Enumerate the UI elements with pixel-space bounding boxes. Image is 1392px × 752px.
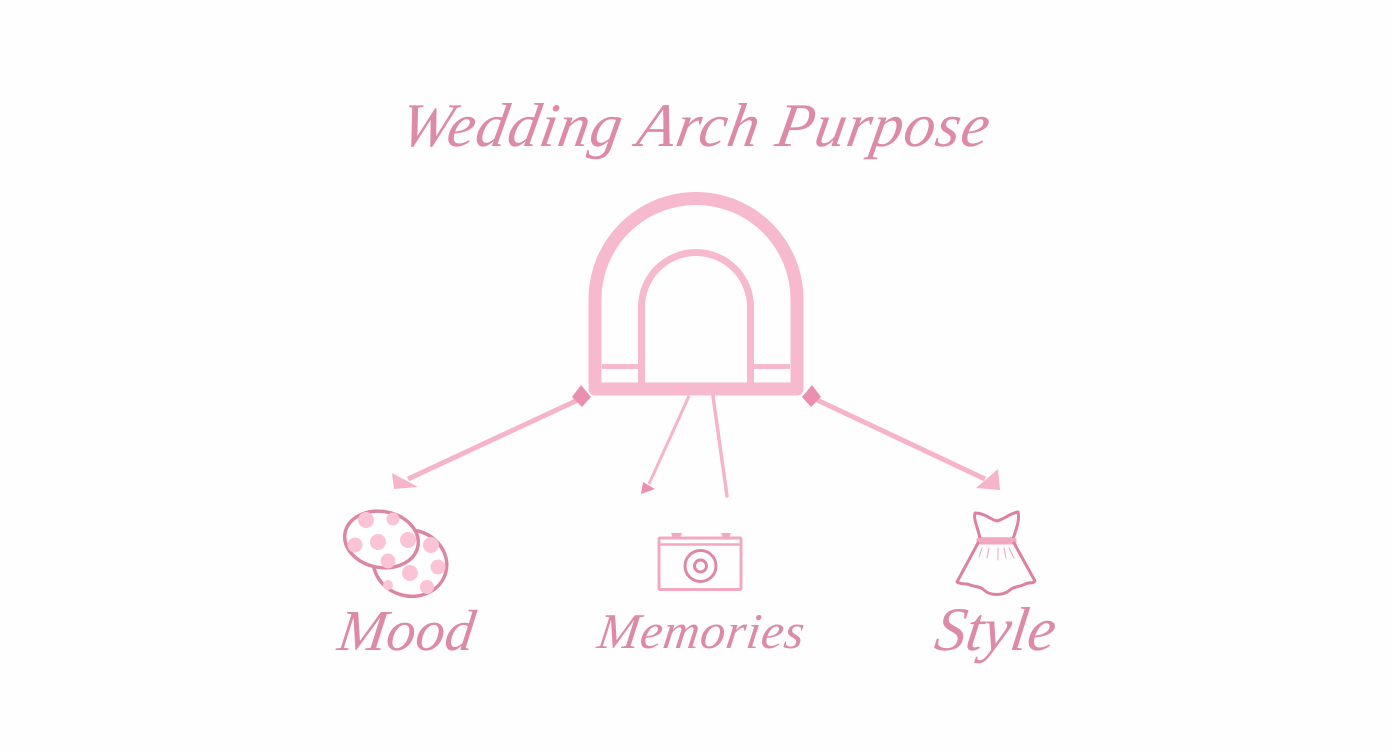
icon: dress — [957, 512, 1035, 594]
arrow: arch to mood — [392, 385, 591, 489]
arrow: arch to memories — [641, 396, 689, 494]
label: Memories: Memories — [593, 603, 808, 659]
icon: mood swatches — [340, 506, 454, 604]
label: Mood: Mood — [333, 598, 480, 663]
title: Wedding Arch Purpose — [396, 90, 996, 160]
arrow: central stem — [713, 396, 727, 496]
label: Style: Style — [931, 595, 1061, 664]
arrow: arch to style — [802, 385, 1000, 490]
icon: wedding arch — [595, 198, 797, 389]
icon: camera — [659, 533, 741, 590]
